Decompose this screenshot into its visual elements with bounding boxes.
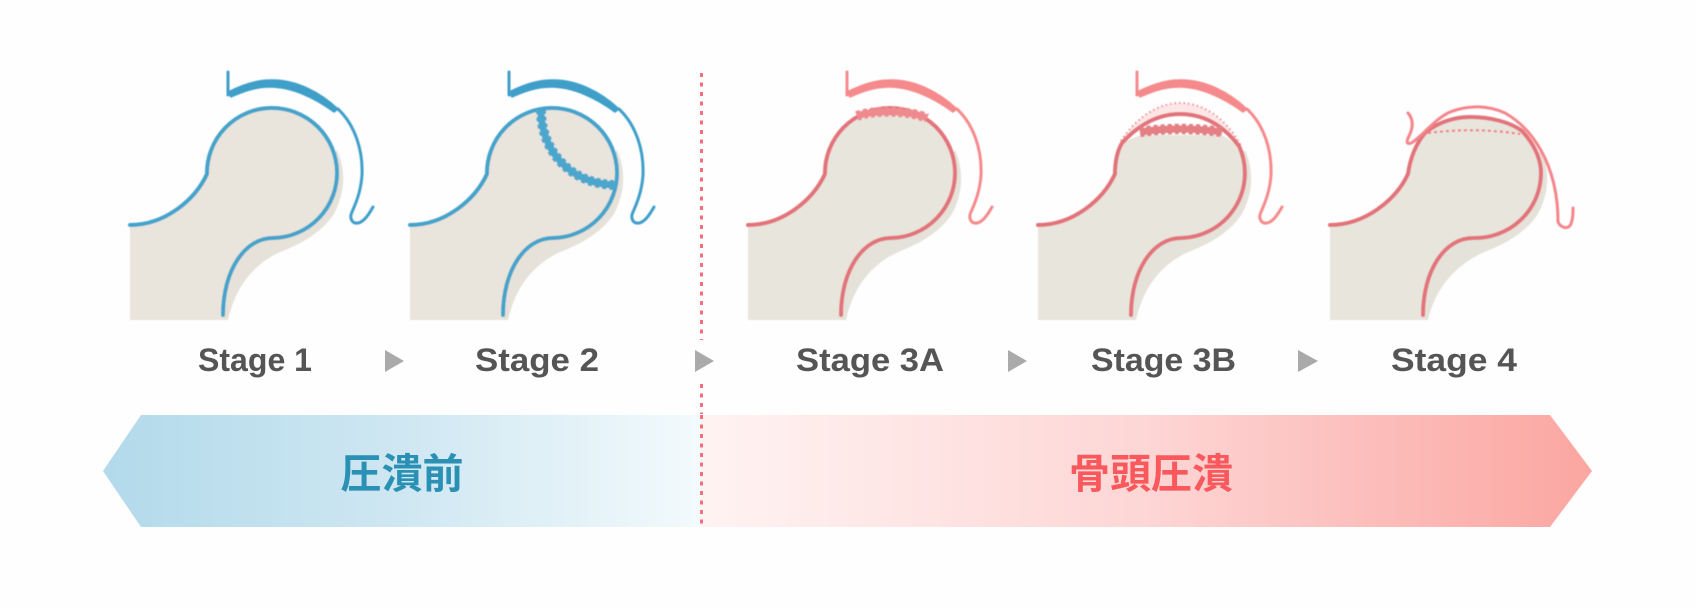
- subchondral fracture band: [857, 112, 927, 118]
- banner: pre-collapse: [103, 415, 701, 527]
- bone outline: [130, 108, 337, 315]
- arrow: stage 1 to 2: [385, 350, 404, 372]
- bone: [748, 108, 955, 320]
- bone shadow: [503, 150, 623, 320]
- bone outline: [1038, 114, 1245, 315]
- banner title: collapse: 骨頭圧潰: [1069, 451, 1233, 497]
- dotted original subchondral line: [1428, 130, 1520, 134]
- bone outline: [748, 108, 955, 315]
- panel: stage 3B diagram: [1038, 72, 1282, 320]
- arrow: stage 2 to 3A: [695, 350, 714, 372]
- divider line, lower: [700, 384, 703, 414]
- cartilage arc: [847, 72, 992, 223]
- label: Stage 1: Stage 1: [198, 342, 312, 378]
- banner: collapse: [701, 415, 1592, 527]
- divider line, banner section: [700, 415, 703, 527]
- panel: stage 1 diagram: [130, 72, 373, 320]
- label: Stage 3B: Stage 3B: [1091, 342, 1236, 378]
- original head contour, dotted: [1121, 103, 1241, 146]
- banner title: pre-collapse: 圧潰前: [340, 451, 464, 497]
- label: Stage 3A: Stage 3A: [796, 342, 944, 378]
- divider line, upper: [700, 73, 703, 340]
- bone shadow: [1131, 150, 1251, 320]
- bone shadow: [1423, 150, 1547, 320]
- detached cartilage line: [1407, 107, 1573, 228]
- bone: [1038, 135, 1245, 320]
- fracture line: [541, 110, 617, 185]
- cartilage arc: [1137, 72, 1282, 223]
- cartilage arc: [509, 72, 654, 223]
- bone: [1330, 117, 1541, 320]
- arrow: stage 3A to 3B: [1008, 350, 1027, 372]
- bone shadow: [841, 150, 961, 320]
- label: Stage 4: Stage 4: [1391, 342, 1517, 378]
- panel: stage 2 diagram: [410, 72, 654, 320]
- bone: [130, 108, 337, 320]
- cartilage arc: [228, 72, 373, 223]
- bone outline: [1330, 117, 1541, 315]
- label: Stage 2: Stage 2: [475, 342, 599, 378]
- panel: stage 3A diagram: [748, 72, 992, 320]
- bone: [410, 108, 617, 320]
- panel: stage 4 diagram: [1330, 107, 1573, 320]
- fracture band: [1140, 129, 1222, 132]
- bone outline: [410, 108, 617, 315]
- bone shadow: [223, 150, 343, 320]
- arrow: stage 3B to 4: [1298, 350, 1318, 372]
